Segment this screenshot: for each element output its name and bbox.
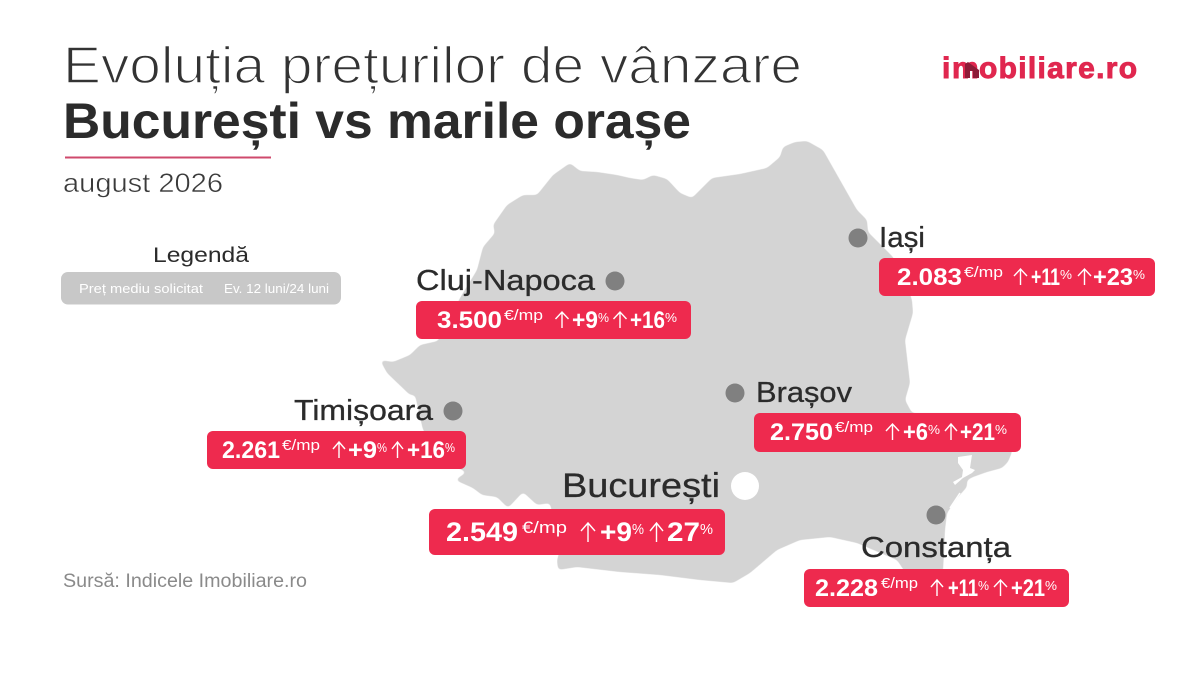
price callout: 2.549 [446,517,518,547]
price callout: +6 [903,419,928,446]
legend [61,244,341,304]
price callout: €/mp [881,575,918,592]
price callout: +16 [407,437,445,464]
price callout: % [598,310,609,325]
price callout [429,509,725,555]
price callout: 3.500 [437,307,502,334]
city: Constanța [804,506,1069,607]
price callout [207,431,466,469]
legend pill [61,272,341,304]
price callout: €/mp [835,419,873,436]
price callout: % [377,440,387,455]
price callout: % [700,521,713,538]
price callout: % [978,578,989,593]
price callout: 27 [667,517,700,547]
price callout: 2.261 [222,437,280,464]
price callout: % [995,422,1007,437]
city marker [444,402,462,420]
map of Romania [380,141,1012,583]
city: Brașov [726,377,1021,452]
price callout: % [632,521,644,538]
city marker [731,472,759,500]
logo: imobiliare.ro: m [952,52,979,85]
price callout: +16 [630,307,665,334]
legend evolution label: Ev. 12 luni/24 luni [224,281,329,296]
city marker [606,272,624,290]
city name: Timișoara [294,395,433,427]
price callout: +9 [572,307,598,334]
price callout: 2.750 [770,419,833,446]
title: București vs marile orașe [63,93,691,149]
price callout: 2.228 [815,575,878,602]
source note: Sursă: Indicele Imobiliare.ro [63,571,307,592]
price callout [804,569,1069,607]
price callout: % [1133,267,1145,282]
date subtitle: august 2026 [63,168,223,198]
price callout: +21 [960,419,995,446]
price callout: 2.083 [897,264,962,291]
legend heading: Legendă [153,244,249,267]
price callout [754,413,1021,452]
logo: imobiliare.ro: i [942,52,950,85]
price callout: % [445,440,455,455]
city marker [926,506,946,524]
price callout: +21 [1011,575,1045,602]
title [63,37,802,149]
city name: Brașov [756,377,853,409]
price callout [879,258,1155,296]
price callout: €/mp [522,518,567,537]
price callout: % [1045,578,1057,593]
price callout: €/mp [964,264,1003,281]
title underline [65,156,271,158]
price callout: % [1060,267,1072,282]
city name: Iași [879,222,925,254]
city marker [848,228,868,248]
price callout: €/mp [282,437,320,454]
city: Cluj-Napoca [416,265,691,339]
price callout: +9 [600,517,632,547]
price callout: +11 [948,575,978,602]
city name: București [562,467,720,505]
price callout: €/mp [504,307,543,324]
legend price label: Preț mediu solicitat [79,281,203,296]
price callout: +9 [348,437,377,464]
city marker [726,384,744,402]
city: Timișoara [207,395,466,469]
price callout [416,301,691,339]
title: Evoluția prețurilor de vânzare [63,37,802,95]
price callout: % [928,422,940,437]
price callout: % [665,310,677,325]
city name: Cluj-Napoca [416,265,595,297]
city: București [429,467,759,555]
city: Iași [848,222,1155,296]
city name: Constanța [861,532,1011,564]
logo: imobiliare.ro: obiliare.ro [979,52,1138,85]
price callout: +11 [1031,264,1060,291]
price callout: +23 [1093,264,1133,291]
